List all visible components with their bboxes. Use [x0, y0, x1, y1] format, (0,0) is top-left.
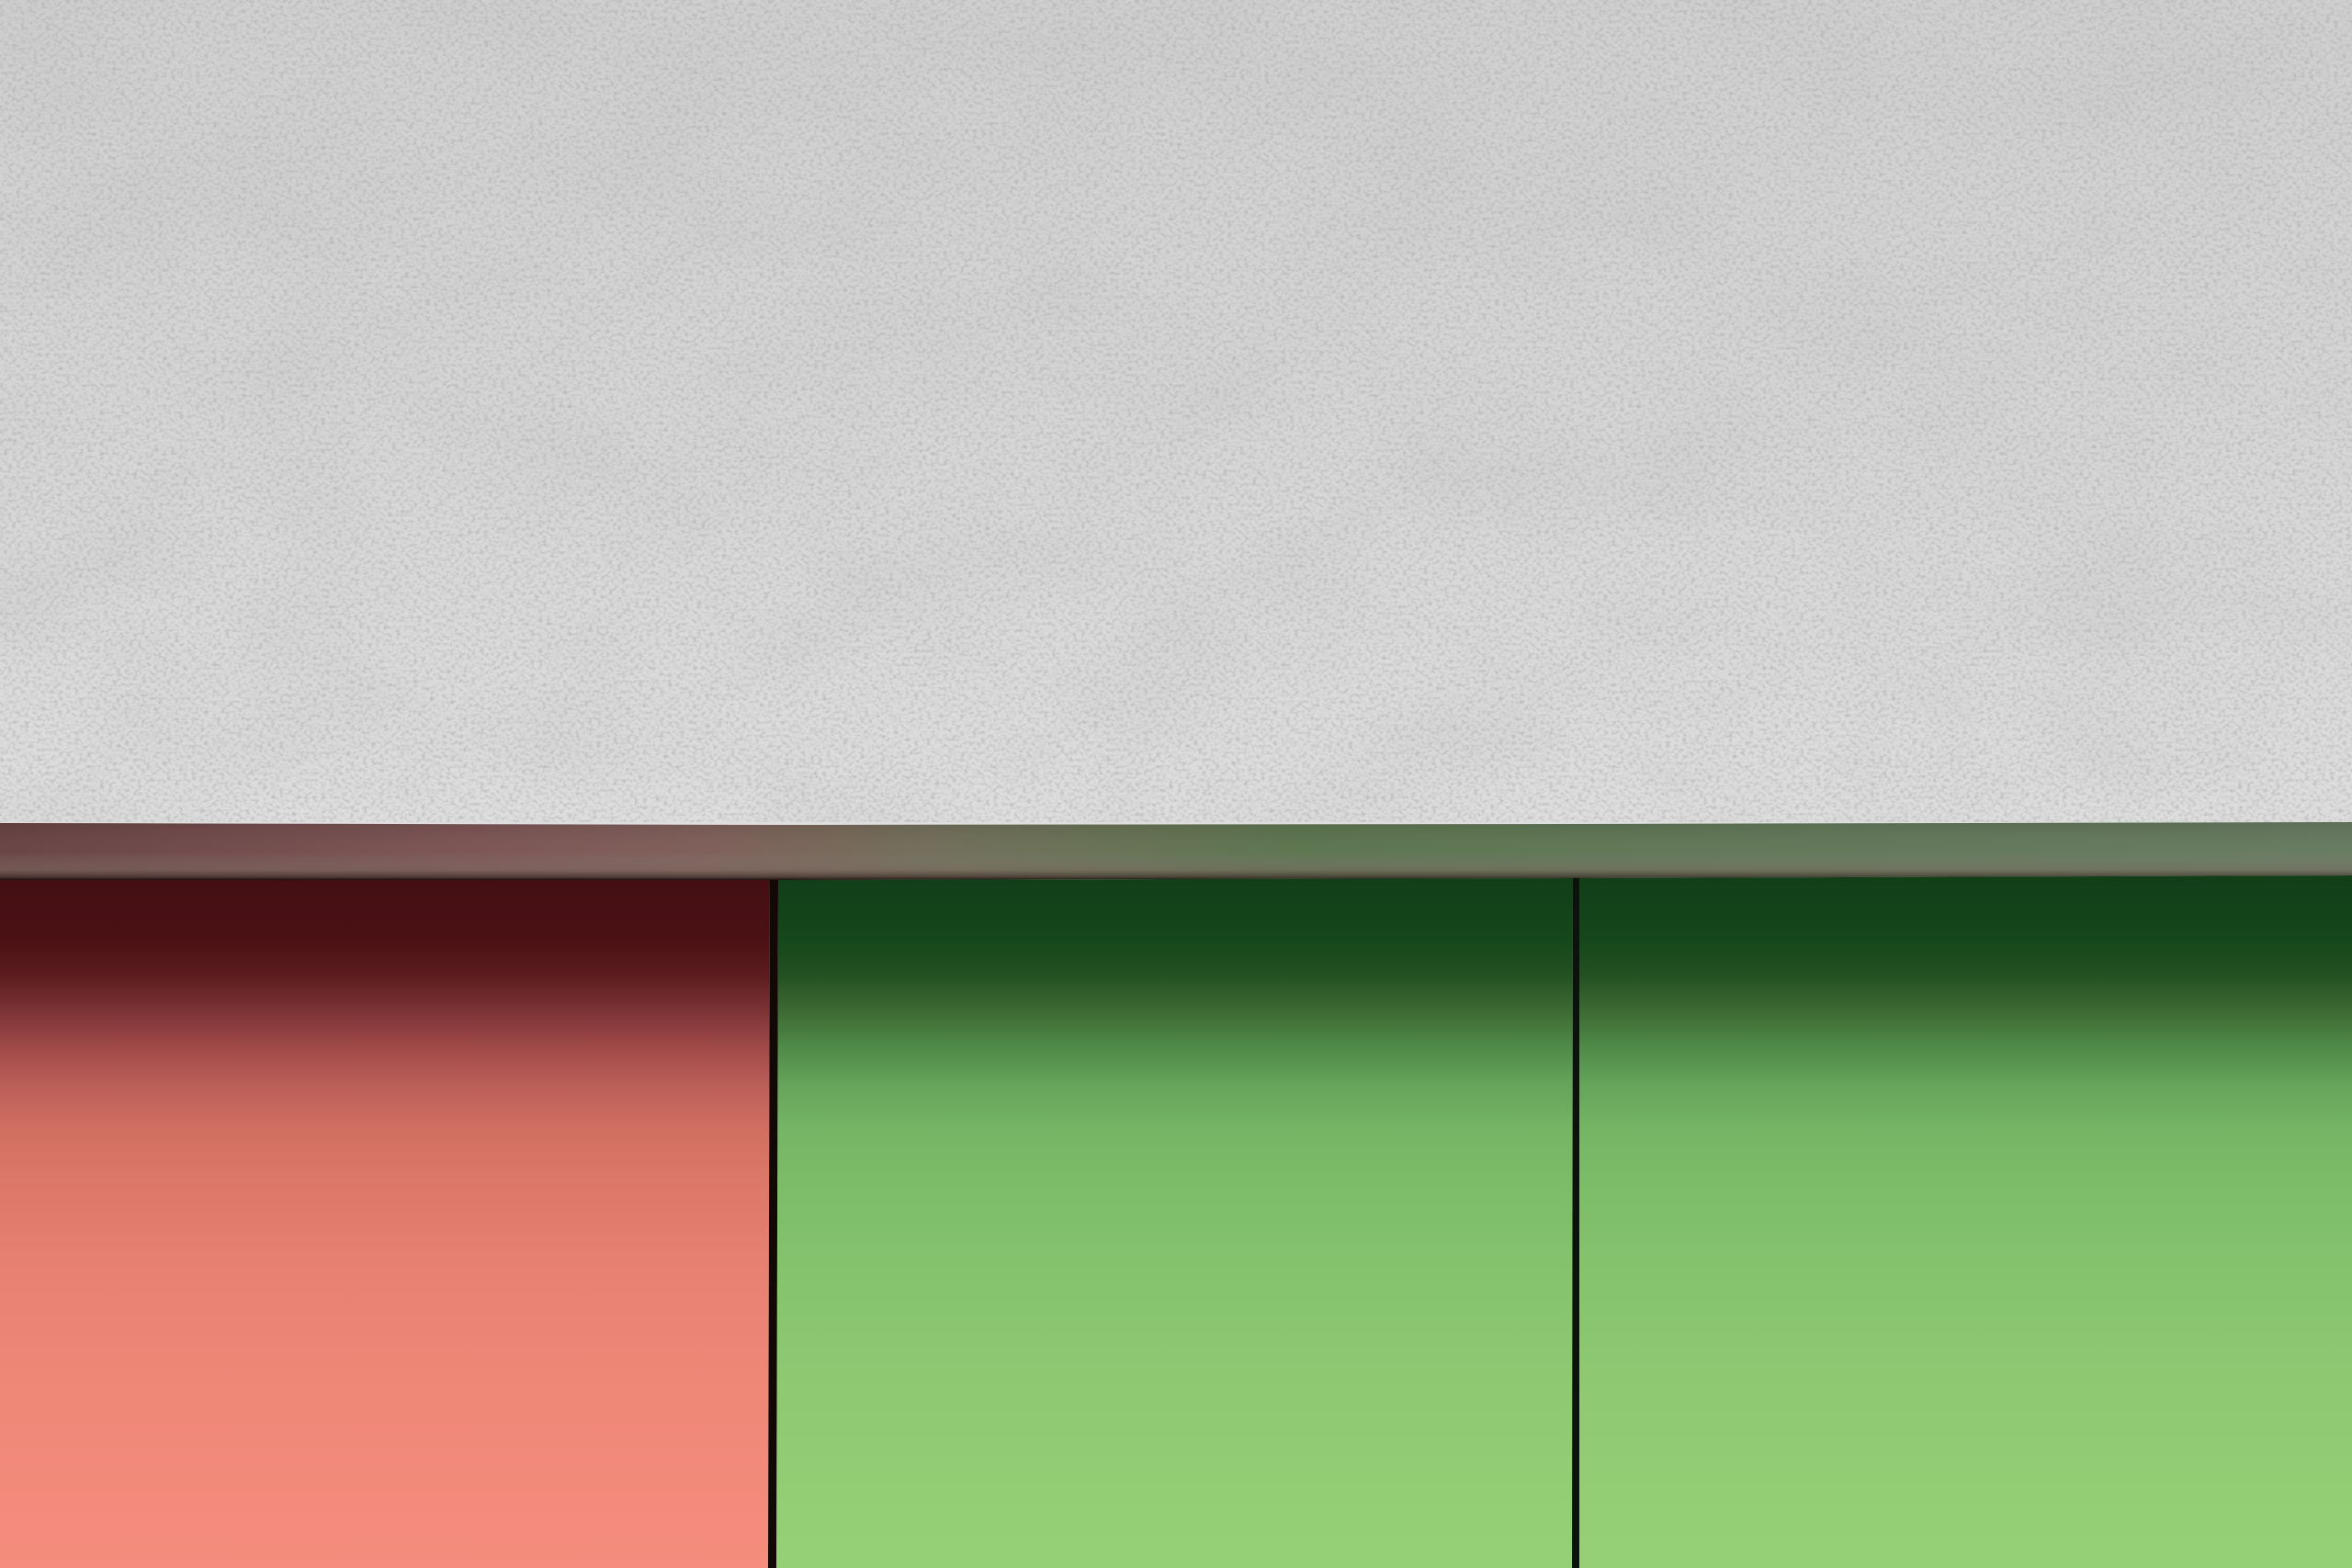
- underside shadow band of the ledge: [0, 822, 2352, 880]
- gap: left divider: [768, 880, 778, 1568]
- panel: red: [0, 880, 770, 1568]
- gap: right divider: [1572, 878, 1579, 1568]
- panel: green right: [1579, 875, 2352, 1568]
- panel: green centre: [776, 878, 1573, 1568]
- concrete slab: [0, 0, 2352, 825]
